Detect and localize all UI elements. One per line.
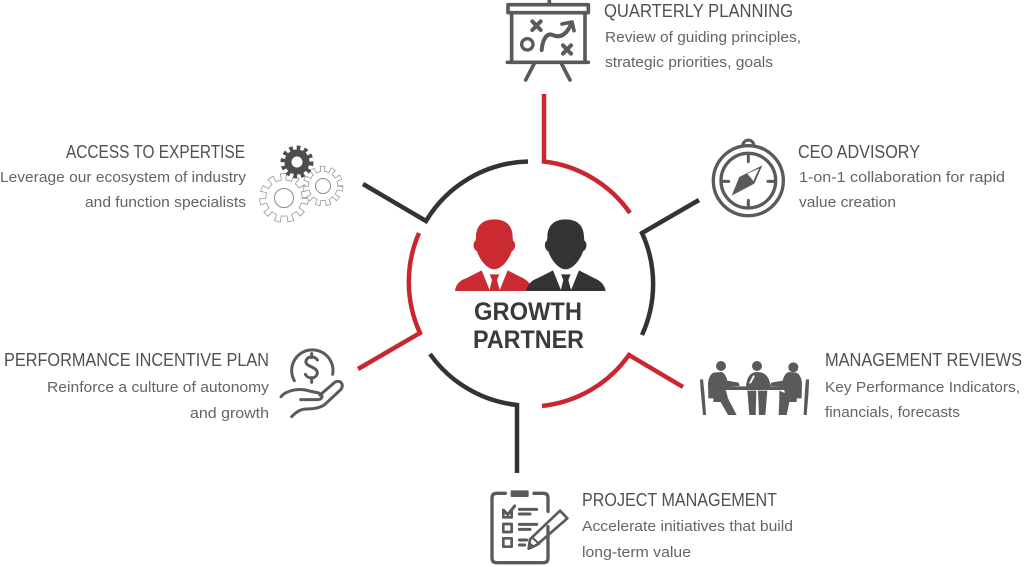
description: Review of guiding principles, (605, 29, 801, 46)
panel: access to expertise (0, 141, 340, 219)
description: value creation (799, 194, 896, 211)
description: Accelerate initiatives that build (582, 518, 793, 535)
panel: CEO advisory (713, 140, 1005, 216)
title: growth partner: PARTNER (473, 326, 584, 354)
ring segment: access to expertise connector (363, 162, 528, 221)
red person (455, 219, 531, 291)
ring segment: quarterly planning connector (544, 94, 630, 213)
panel: performance incentive plan (4, 349, 342, 422)
central hub diagram (358, 94, 699, 473)
description (799, 169, 1005, 211)
panel: management reviews (700, 349, 1022, 421)
description (825, 379, 1020, 421)
description: and growth (190, 405, 269, 422)
large outline gear (263, 177, 305, 219)
dark person (526, 219, 606, 291)
description: 1-on-1 collaboration for rapid (799, 169, 1005, 186)
icon: clipboard checklist with pencil (492, 490, 567, 563)
description: and function specialists (85, 194, 246, 211)
description (0, 169, 247, 211)
description: financials, forecasts (825, 404, 960, 421)
ring segment: performance incentive connector (358, 233, 420, 369)
panel: quarterly planning (507, 0, 801, 80)
title: growth partner (473, 298, 584, 354)
description: Reinforce a culture of autonomy (47, 379, 270, 396)
ring segment: management reviews connector (542, 355, 683, 406)
title: growth partner: GROWTH (474, 298, 582, 326)
heading: PERFORMANCE INCENTIVE PLAN (4, 349, 269, 370)
heading: CEO ADVISORY (798, 141, 920, 162)
solid dark gear (283, 148, 311, 176)
small outline gear (306, 169, 340, 203)
description: Leverage our ecosystem of industry (0, 169, 247, 186)
description: Key Performance Indicators, (825, 379, 1020, 396)
icon: compass (713, 140, 783, 216)
heading: ACCESS TO EXPERTISE (66, 141, 245, 162)
icon: hand holding dollar coin (281, 350, 342, 417)
heading: QUARTERLY PLANNING (604, 0, 793, 21)
icon: gears (263, 148, 340, 219)
heading: PROJECT MANAGEMENT (582, 489, 777, 510)
ring segment: CEO advisory connector (642, 200, 699, 335)
description (582, 518, 793, 561)
icon: two business people (455, 219, 606, 291)
panel: project management (492, 489, 793, 563)
icon: strategy presentation board (507, 0, 588, 80)
description (47, 379, 270, 422)
description: long-term value (582, 544, 691, 561)
description (605, 29, 801, 71)
ring segment: project management connector (430, 354, 517, 473)
icon: people meeting at table (700, 361, 809, 415)
description: strategic priorities, goals (605, 54, 773, 71)
